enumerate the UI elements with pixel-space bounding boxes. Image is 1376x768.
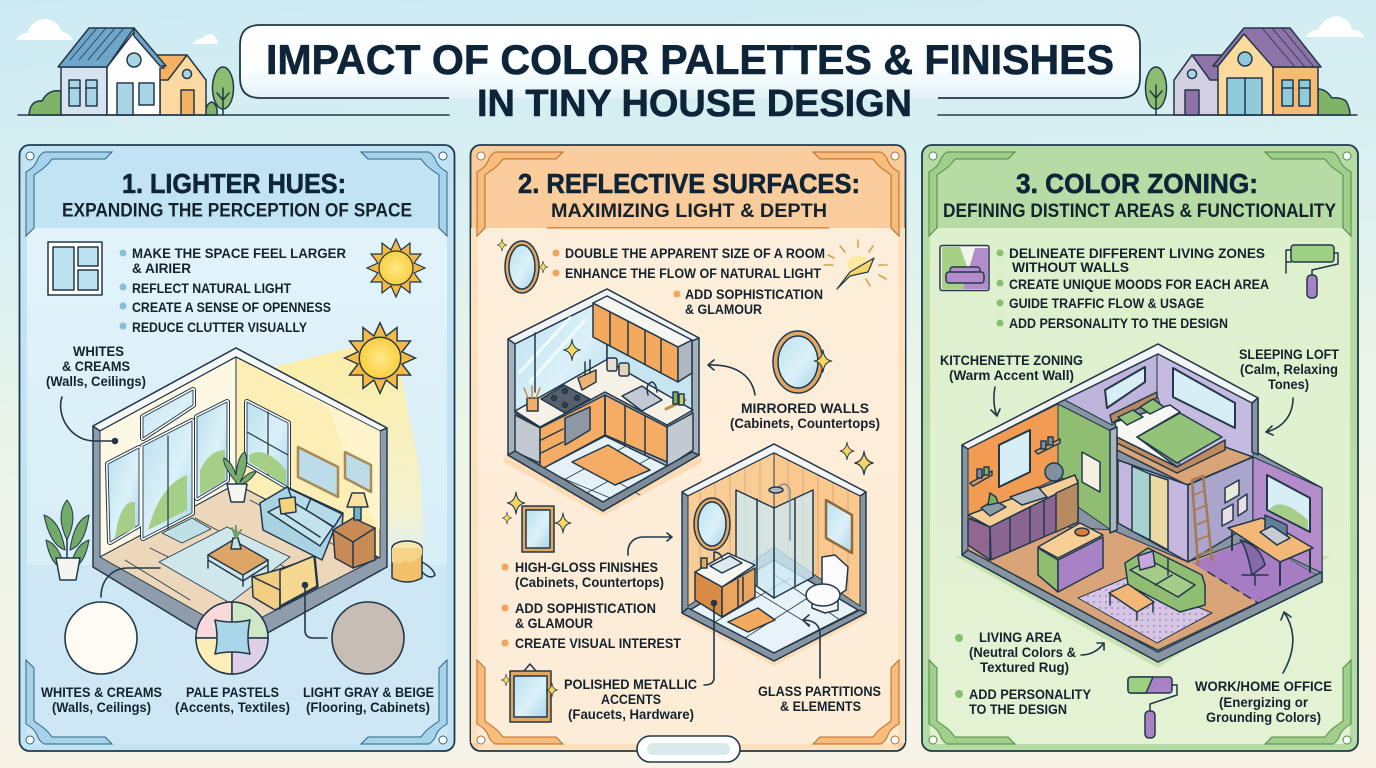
panel 2 heading: 2. REFLECTIVE SURFACES: — [518, 168, 860, 199]
callout: mirrored walls — [730, 401, 880, 431]
callout: kitchenette — [940, 353, 1083, 383]
table — [208, 540, 268, 575]
isometric kitchen — [503, 289, 703, 516]
arrow: high gloss — [628, 533, 672, 555]
callout: living area — [955, 630, 1076, 675]
callout: mirrored walls: (Cabinets, Countertops) — [730, 416, 880, 431]
bullet list: REFLECT NATURAL LIGHT — [132, 281, 292, 296]
rug — [1078, 577, 1212, 643]
callout: whites and creams: (Walls, Ceilings) — [46, 374, 146, 389]
icon: oval mirror — [497, 239, 548, 293]
arrow: sleeping loft — [1266, 398, 1293, 435]
bullet list: DELINEATE DIFFERENT LIVING ZONES — [1009, 246, 1265, 261]
callout: polished metallic accents: POLISHED METALLIC — [564, 677, 697, 692]
island — [1038, 523, 1103, 558]
panel 3 corner ornaments — [929, 152, 1351, 744]
nightstand and lamp — [333, 518, 375, 568]
callout: whites and creams: WHITES — [73, 344, 124, 359]
callout: sleeping loft: (Calm, Relaxing — [1240, 362, 1338, 377]
upper windows — [1105, 367, 1145, 408]
sofa — [260, 487, 343, 560]
mirrored walls callout icon — [773, 331, 832, 393]
callout: glass partitions: & ELEMENTS — [780, 699, 861, 714]
pictures — [1225, 480, 1239, 503]
callout: polished metallic accents — [564, 677, 697, 722]
kitchen window and shelves — [999, 430, 1030, 487]
bullet list: CREATE UNIQUE MOODS FOR EACH AREA — [1009, 277, 1269, 292]
swatch: light gray and beige — [332, 602, 404, 674]
callout: mirrored walls: MIRRORED WALLS — [741, 401, 869, 416]
counter and base cabinets — [515, 360, 693, 427]
sparkles — [840, 442, 874, 475]
corner plant — [224, 452, 256, 486]
oval mirror — [694, 498, 730, 550]
icon: shining glint — [824, 240, 887, 289]
bullet list: ENHANCE THE FLOW OF NATURAL LIGHT — [565, 266, 822, 281]
windows — [108, 390, 288, 542]
framed mirror — [826, 500, 852, 553]
callout: kitchenette: KITCHENETTE ZONING — [940, 353, 1083, 368]
callout: sleeping loft — [1239, 347, 1340, 392]
ground lines — [18, 114, 1357, 116]
toilet — [822, 555, 848, 597]
leader: metallic accents — [704, 600, 716, 685]
armchair — [252, 557, 318, 610]
front floor edge — [962, 550, 1322, 662]
kitchen floor — [540, 436, 667, 502]
callout: work office: WORK/HOME OFFICE — [1195, 679, 1332, 694]
stove — [541, 385, 590, 413]
panel 3 heading — [943, 168, 1336, 222]
bullet list lower: & GLAMOUR — [515, 616, 593, 631]
panel 1 heading: EXPANDING THE PERCEPTION OF SPACE — [62, 200, 412, 222]
icon: wall mirror — [501, 664, 558, 722]
potted plant — [44, 500, 89, 580]
swatch captions: (Accents, Textiles) — [175, 700, 290, 715]
big sun — [345, 323, 415, 393]
bullet: add personality: TO THE DESIGN — [969, 702, 1067, 717]
swatch: whites and creams — [65, 602, 137, 674]
isometric bathroom — [678, 444, 870, 666]
orange wall and green partition — [968, 404, 1058, 520]
panel 1 corner ornaments — [26, 152, 447, 744]
arrow: work area — [1281, 612, 1293, 673]
title text: IN TINY HOUSE DESIGN — [477, 83, 912, 125]
bullet list lower: HIGH-GLOSS FINISHES — [515, 560, 658, 575]
callout: living area: Textured Rug) — [980, 660, 1069, 675]
bullet list lower: ADD SOPHISTICATION — [515, 601, 656, 616]
ladder — [1192, 476, 1212, 565]
panel 1 heading — [62, 168, 412, 222]
panel 2 heading — [518, 168, 860, 222]
bullet list: ADD SOPHISTICATION — [685, 287, 823, 302]
bullet list: REDUCE CLUTTER VISUALLY — [132, 320, 307, 335]
sofa — [1125, 548, 1205, 612]
bullet list lower — [502, 560, 682, 651]
callout: glass partitions: GLASS PARTITIONS — [758, 684, 881, 699]
bullet list — [552, 246, 825, 317]
panel 3 heading: DEFINING DISTINCT AREAS & FUNCTIONALITY — [943, 201, 1336, 222]
callout: living area: LIVING AREA — [979, 630, 1062, 645]
rug, mat — [159, 527, 290, 603]
bullet list lower: CREATE VISUAL INTEREST — [515, 636, 682, 651]
panel 2 heading: MAXIMIZING LIGHT & DEPTH — [551, 200, 827, 222]
callout: kitchenette: (Warm Accent Wall) — [949, 368, 1074, 383]
bullet: add personality: ADD PERSONALITY — [969, 687, 1091, 702]
leader: armchair — [302, 582, 327, 638]
upper cabinets — [593, 303, 678, 382]
swatch captions: (Flooring, Cabinets) — [306, 700, 430, 715]
isometric living room — [93, 348, 387, 652]
kitchen counter — [968, 475, 1078, 527]
arrow: kitchenette — [991, 387, 1000, 416]
bullet list — [120, 246, 346, 335]
bullet list: & GLAMOUR — [685, 302, 762, 317]
floor — [968, 520, 1316, 650]
vanity — [695, 553, 755, 587]
bullet list: & AIRIER — [132, 261, 191, 276]
title text: IMPACT OF COLOR PALETTES & FINISHES — [266, 36, 1114, 83]
purple office — [1253, 457, 1322, 573]
icon: zoned sofa — [940, 246, 989, 290]
callout: polished metallic accents: ACCENTS — [601, 692, 661, 707]
callout: sleeping loft: SLEEPING LOFT — [1239, 347, 1340, 362]
icon: window — [48, 242, 102, 295]
callout: glass partitions — [758, 684, 881, 714]
bath mat — [728, 608, 775, 632]
isometric tiny house zoning — [955, 344, 1330, 668]
bullet list: WITHOUT WALLS — [1012, 260, 1129, 275]
leader: walls — [61, 397, 118, 444]
panel 1: lighter hues — [20, 145, 454, 751]
icon: small sun — [367, 239, 425, 297]
swatch captions: WHITES & CREAMS — [41, 685, 162, 700]
title banner — [240, 25, 1140, 125]
desk, laptop and chair — [1228, 518, 1313, 562]
shower — [736, 490, 813, 598]
callout: work office: (Energizing or — [1219, 695, 1309, 710]
arrow: glass partitions — [803, 615, 820, 678]
header: left houses illustration — [16, 19, 234, 115]
callout: whites and creams — [46, 344, 146, 389]
callout: polished metallic accents: (Faucets, Hardware) — [568, 707, 694, 722]
bullet: add personality — [955, 687, 1091, 717]
bullet list — [996, 246, 1269, 331]
callout: work office: Grounding Colors) — [1206, 710, 1321, 725]
loft floor and bed — [1117, 438, 1253, 485]
panel 3: color zoning — [922, 145, 1358, 751]
callout: whites and creams: & CREAMS — [62, 359, 130, 374]
arrow: mirrored walls — [708, 360, 755, 395]
panel 1 heading: 1. LIGHTER HUES: — [122, 168, 346, 199]
swatch captions: PALE PASTELS — [186, 685, 279, 700]
title text — [266, 36, 1114, 125]
bullet list: ADD PERSONALITY TO THE DESIGN — [1009, 316, 1228, 331]
bullet list: MAKE THE SPACE FEEL LARGER — [132, 246, 346, 261]
sun beams — [262, 345, 425, 565]
panel 2 corner ornaments — [477, 152, 899, 744]
icon: purple green roller — [1128, 677, 1177, 738]
upper lavender walls — [1063, 350, 1157, 425]
panel 3 heading: 3. COLOR ZONING: — [1016, 168, 1258, 199]
swatch captions: LIGHT GRAY & BEIGE — [303, 685, 434, 700]
callout: living area: (Neutral Colors & — [969, 645, 1076, 660]
paint can — [392, 541, 435, 582]
icon: paint roller — [1286, 245, 1338, 298]
swatch captions — [41, 685, 434, 715]
swatch: pale pastels — [196, 602, 268, 674]
arrow: living area — [1081, 643, 1104, 655]
bottom pill — [637, 736, 740, 762]
callout: work office — [1195, 679, 1332, 725]
panel 2: reflective surfaces — [470, 145, 906, 762]
leader: rug — [101, 568, 160, 597]
callout: sleeping loft: Tones) — [1268, 377, 1309, 392]
header: right houses illustration — [1146, 16, 1364, 115]
coffee table — [1109, 584, 1154, 612]
under loft — [1118, 460, 1188, 562]
swatch captions: (Walls, Ceilings) — [52, 700, 151, 715]
sink and accessories — [622, 386, 662, 411]
bullet list: CREATE A SENSE OF OPENNESS — [132, 300, 331, 315]
icon: rectangular mirror with sparkles — [502, 492, 571, 552]
bullet list: GUIDE TRAFFIC FLOW & USAGE — [1009, 296, 1204, 311]
bullet list: DOUBLE THE APPARENT SIZE OF A ROOM — [565, 246, 825, 261]
bullet list lower: (Cabinets, Countertops) — [515, 575, 664, 590]
